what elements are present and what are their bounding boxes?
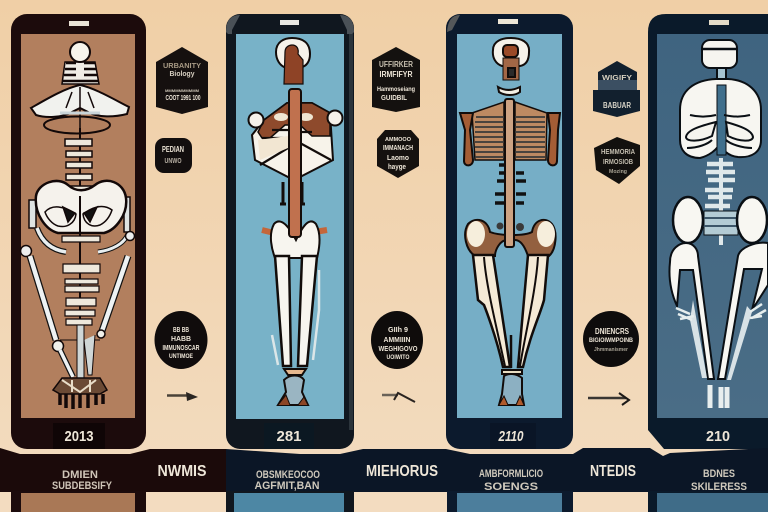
badge: circle 1: IMMUNOSCAR xyxy=(162,345,200,352)
badge: hexagon 2a: UFFIRKER xyxy=(379,60,413,69)
label: tag 3: NTEDIS xyxy=(590,463,636,480)
skeleton 3 xyxy=(460,38,560,405)
year label 3: 2110 xyxy=(498,428,524,445)
label: column 1 title xyxy=(52,469,113,492)
year label 3 xyxy=(490,423,536,449)
panel: skeleton phone 4 (dark blue) xyxy=(648,14,768,449)
year label 2 xyxy=(264,423,314,449)
bottom band with labels xyxy=(0,448,768,512)
year label 1: 2013 xyxy=(64,428,94,445)
badge: hexagon 2b: Laomo xyxy=(387,155,409,162)
badge: hexagon 2a: IRMFIFYR xyxy=(380,70,413,79)
badge: rounded 1b: PEDIAN xyxy=(162,145,184,154)
badge: circle 1: BB BB xyxy=(173,327,189,334)
badge: circle 3 xyxy=(583,311,639,367)
band continuation of phones xyxy=(11,491,768,512)
badge: hexagon 1a: COOT 1991 100 xyxy=(166,95,201,102)
badge: hexagon 3b: HEMMORIA xyxy=(601,149,635,156)
badge: circle 1: UNTIMOE xyxy=(169,354,193,360)
badge: hexagon 1a: Biology xyxy=(170,71,195,78)
badge: circle 2: GIIh 9 xyxy=(388,327,408,334)
label: column 3 title: SOENGS xyxy=(484,481,538,493)
label: column 3 title xyxy=(479,468,543,493)
label: column 2 title: OBSMKEOCOO xyxy=(256,469,320,481)
badge: hexagon 3a: BABUAR xyxy=(603,101,631,110)
label: tag 2: MIEHORUS xyxy=(366,463,438,480)
panel: skeleton phone 2 (blue) xyxy=(226,14,354,449)
label: tag 1: NWMIS xyxy=(158,463,207,480)
badge: circle 3: Jhmmanismer xyxy=(594,347,628,353)
badge: hexagon 1a: URBANITY xyxy=(163,63,201,70)
label: column 1 title: DMIEN xyxy=(62,469,98,481)
arrow 2 xyxy=(382,393,415,402)
year label 2: 281 xyxy=(276,428,302,445)
badge: circle 2: AMMIIIN xyxy=(384,337,410,344)
badge: hexagon 3a: WIGIFY xyxy=(602,75,632,82)
year label 1 xyxy=(53,423,105,449)
badge: hexagon 3a xyxy=(593,61,640,117)
panel: skeleton phone 3 (blue) xyxy=(446,14,573,449)
panel: skeleton phone 1 (brown) xyxy=(11,14,146,449)
skeleton 2 xyxy=(248,38,342,405)
badge: hexagon 2a xyxy=(372,47,420,112)
badge: hexagon 2a: GUIDBIL xyxy=(381,95,408,102)
badge: circle 2: UOIWITO xyxy=(386,355,410,361)
badge: circle 1: HABB xyxy=(171,336,191,343)
badge: hexagon 1a xyxy=(156,47,208,114)
badge: hexagon 1a: MMMMMMMMMM xyxy=(165,88,200,93)
arrow 3 xyxy=(588,393,629,405)
badge: circle 3: BIGIOIWMPOINB xyxy=(589,338,634,344)
badge: hexagon 3b: Mozing xyxy=(609,169,627,175)
badge: hexagon 3b xyxy=(594,137,640,184)
badge: hexagon 2b xyxy=(377,130,419,178)
badge: hexagon 2b: IMMANACH xyxy=(383,145,413,152)
spine 4 xyxy=(705,158,735,245)
badge: rounded 1b xyxy=(155,138,192,173)
badge: hexagon 3b: IRMOSIOB xyxy=(603,159,633,166)
label: column 1 title: SUBDEBSIFY xyxy=(52,480,113,492)
skeleton 1 xyxy=(20,42,134,409)
badge: hexagon 2a: Hammoseiang xyxy=(377,87,415,93)
badge: hexagon 2b: AMMOOO xyxy=(385,137,411,143)
skeleton 4 xyxy=(680,40,761,158)
label: column 2 title: AGFMIT,BAN xyxy=(254,480,320,492)
label: column 4 title: SKILERESS xyxy=(691,481,747,493)
arrow 1 xyxy=(167,392,198,401)
badge: circle 3: DNIENCRS xyxy=(595,327,630,336)
label: column 3 title: AMBFORMLICIO xyxy=(479,468,543,480)
badge: hexagon 2b: hayge xyxy=(388,164,406,171)
label: column 4 title xyxy=(691,468,747,493)
badge: circle 2 xyxy=(371,311,423,369)
pelvis and legs 4 xyxy=(669,197,768,379)
year label 4: 210 xyxy=(706,428,730,445)
badge: rounded 1b: UNWO xyxy=(164,158,182,165)
label: column 4 title: BDNES xyxy=(703,468,735,480)
badge: circle 2: WEGHIGOVO xyxy=(378,346,418,353)
badge: circle 1 xyxy=(154,311,208,369)
label: column 2 title xyxy=(254,469,320,492)
